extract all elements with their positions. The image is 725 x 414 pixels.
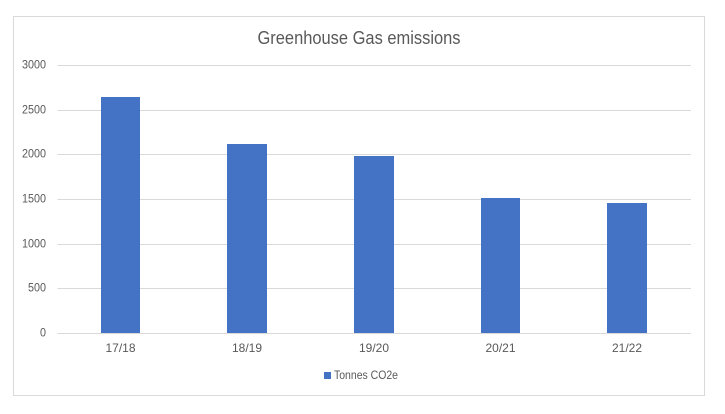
bars xyxy=(101,97,647,333)
y axis labels: 1000 xyxy=(22,236,46,250)
x axis labels: 18/19 xyxy=(232,341,262,355)
x axis labels: 17/18 xyxy=(105,341,136,355)
y axis labels: 2000 xyxy=(22,146,46,160)
x axis labels: 21/22 xyxy=(612,341,642,355)
legend: Tonnes CO2e xyxy=(334,368,398,382)
x axis labels xyxy=(105,341,642,355)
y axis labels: 3000 xyxy=(22,58,46,72)
y axis labels: 2500 xyxy=(22,102,46,116)
title: Greenhouse Gas emissions xyxy=(258,28,460,48)
y axis labels xyxy=(22,58,46,340)
y axis labels: 500 xyxy=(28,280,46,294)
x axis labels: 19/20 xyxy=(359,341,389,355)
y axis labels: 0 xyxy=(40,326,46,340)
x axis labels: 20/21 xyxy=(485,341,516,355)
y axis labels: 1500 xyxy=(22,192,46,206)
